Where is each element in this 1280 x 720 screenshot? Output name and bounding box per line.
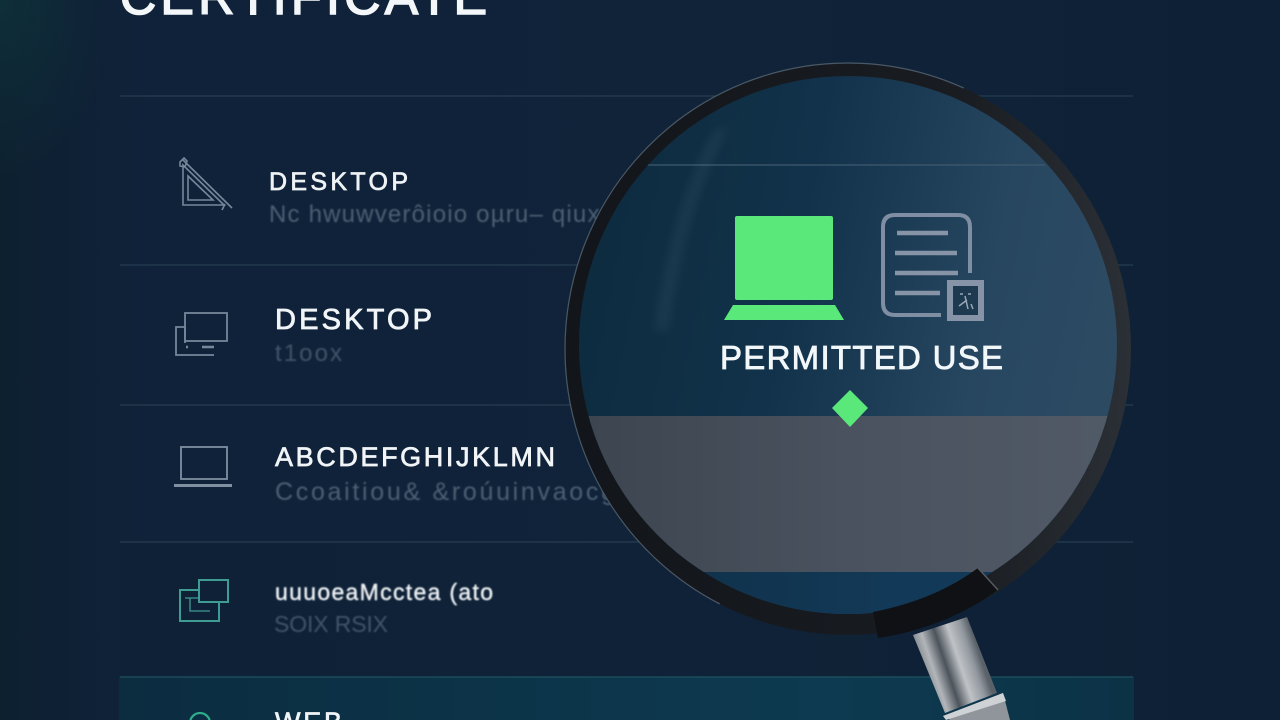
row 4 text: SOIX RSIX <box>274 611 388 637</box>
collar <box>873 568 998 638</box>
icon: document with stamp <box>883 215 981 318</box>
grey band <box>570 416 1130 572</box>
icon: overlapping windows <box>180 580 228 621</box>
row 3 text: ABCDEFGHIJKLMN <box>275 442 555 472</box>
icon: laptop <box>174 447 232 486</box>
row 2 text: t1oox <box>275 340 342 367</box>
row 3 text <box>275 442 615 506</box>
row 1 text <box>269 168 614 228</box>
lens rim <box>565 63 1131 635</box>
row 2 text <box>275 304 432 367</box>
icon: set square <box>180 158 232 210</box>
row 4 text <box>274 579 493 637</box>
icon: green laptop <box>724 216 844 320</box>
row 3 text: Ccoaitiou& &roúuinvaocg <box>275 478 615 506</box>
highlighted row: web <box>119 677 1134 720</box>
row 2 text: DESKTOP <box>275 304 432 336</box>
row 4 text: uuuoeaMcctea (ato <box>275 579 493 605</box>
diamond marker <box>832 390 868 427</box>
lens view <box>570 70 1130 622</box>
lens label: PERMITTED USE <box>720 339 1003 376</box>
handle <box>913 617 1010 720</box>
icon: globe <box>190 713 210 720</box>
icon: desktop windows <box>176 313 227 355</box>
glass highlight <box>659 136 719 325</box>
row 1 text: Nc hwuwverôioio oµru– qiuxe <box>269 201 614 228</box>
row 1 text: DESKTOP <box>269 168 408 196</box>
panel: usage table <box>119 96 1134 720</box>
magnifying glass <box>565 63 1131 720</box>
